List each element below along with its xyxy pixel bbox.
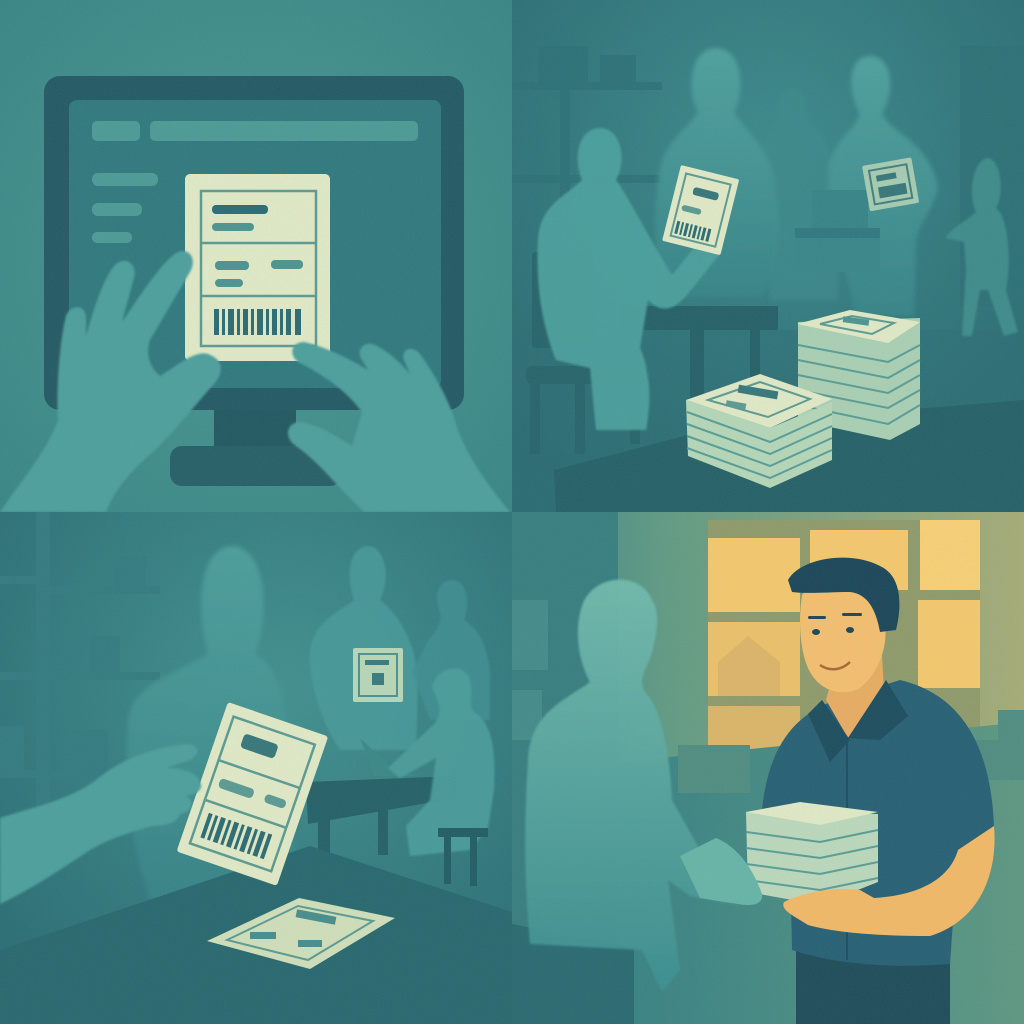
label stack: short	[686, 374, 832, 488]
panel: handover of label stack	[512, 512, 1024, 1024]
icon: reaching hand	[0, 744, 201, 904]
background shelves	[602, 55, 662, 183]
person with stack of labels	[762, 558, 994, 1024]
background shelving	[148, 672, 160, 680]
foreground table	[50, 846, 512, 1024]
hair	[788, 558, 899, 632]
ghost figure: background right	[412, 580, 490, 720]
chair	[526, 252, 648, 454]
background boxes	[678, 710, 1024, 793]
neck	[826, 656, 884, 738]
icon: left hand	[0, 251, 221, 512]
ghost figure: distant right	[945, 158, 1018, 336]
floor	[512, 330, 1024, 512]
trousers	[796, 950, 950, 1024]
shirt	[762, 680, 994, 966]
left wall	[530, 512, 618, 717]
large label in hand	[177, 702, 328, 886]
ghost figure: left	[525, 580, 760, 992]
background table	[643, 306, 778, 398]
ghost figure: centre	[655, 48, 779, 296]
small label held	[353, 648, 403, 702]
panel: designing a label on a monitor	[0, 0, 512, 512]
lower wall and floor	[618, 722, 1024, 1024]
shipping label on screen	[185, 174, 330, 361]
label held by right figure	[862, 157, 919, 211]
ghost figure: right	[828, 56, 938, 316]
icon: right hand	[288, 342, 510, 512]
foreground table	[554, 400, 1024, 512]
ghost figure: seated	[388, 668, 494, 856]
laptop	[360, 738, 372, 750]
foreground left counter	[512, 924, 634, 1024]
icon: ghost hand	[680, 838, 762, 905]
collar	[808, 680, 908, 762]
ghost figure: seated holding label	[538, 128, 722, 430]
icon: person's arm and hand	[783, 826, 995, 936]
stool	[438, 828, 488, 886]
icon: monitor stand	[170, 405, 342, 486]
desk	[306, 777, 434, 855]
panel: warehouse office with label in hand	[0, 512, 512, 1024]
boxes	[795, 190, 880, 238]
label stack held	[746, 802, 878, 905]
label stack: tall	[797, 310, 920, 440]
window	[708, 520, 980, 750]
screen interface bars	[92, 121, 418, 243]
icon: monitor	[44, 76, 464, 410]
eyes and smile	[808, 613, 862, 635]
ghost figure: distant centre	[774, 282, 836, 298]
flat label on table	[207, 898, 395, 969]
button placket	[846, 740, 848, 960]
ghost figure: background centre	[310, 546, 418, 750]
panel: people holding labels near stacks	[512, 0, 1024, 512]
label held by centre figure	[662, 165, 739, 255]
ghost figure: foreground standing	[128, 545, 268, 897]
face	[800, 580, 886, 692]
